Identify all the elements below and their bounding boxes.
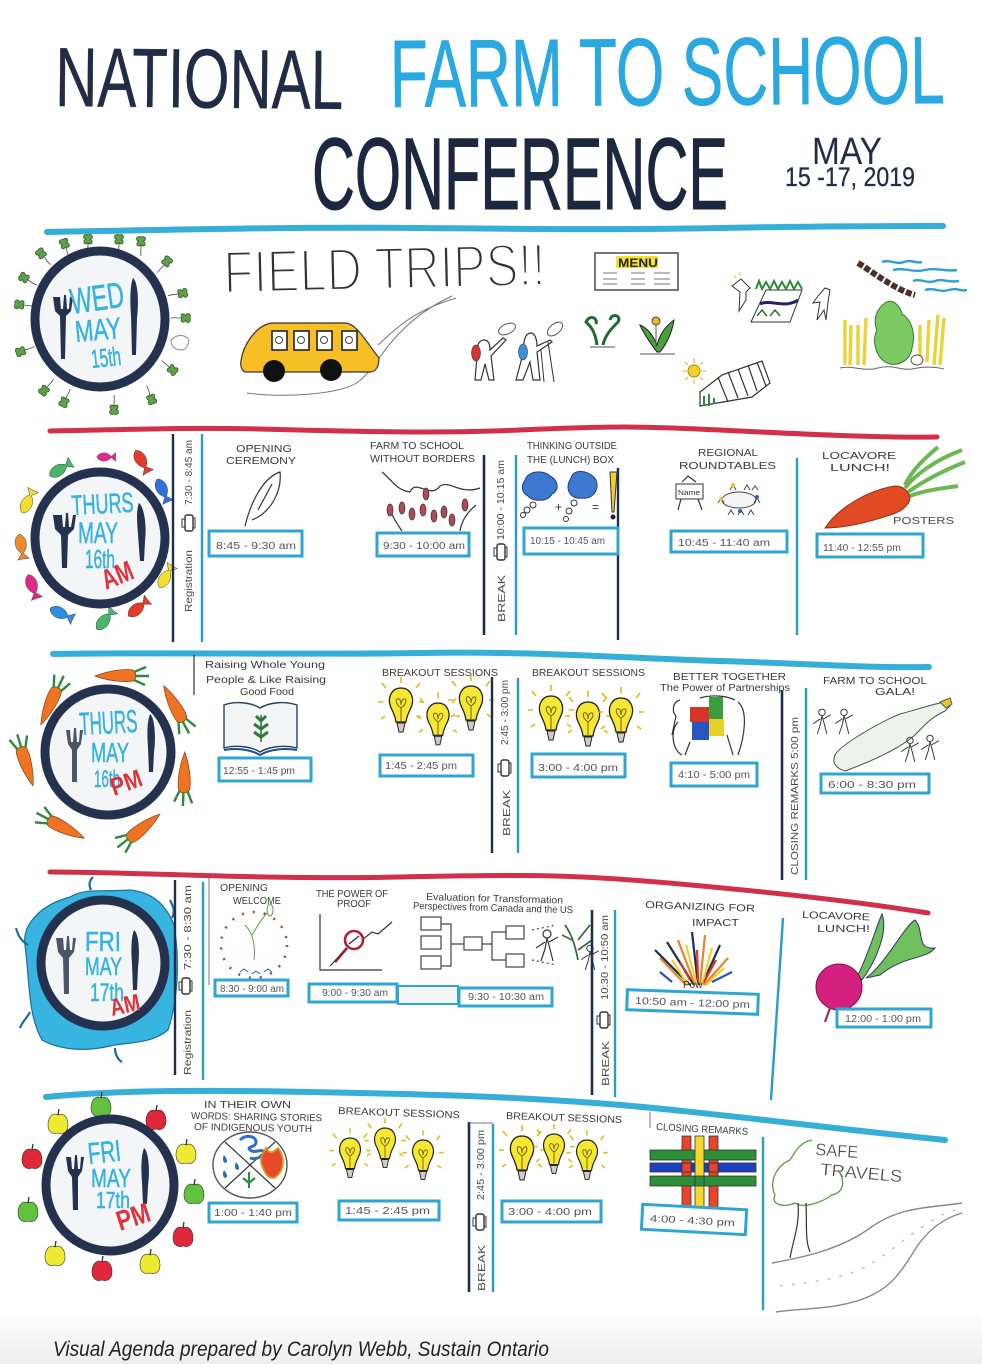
- session: farm to school gala: GALA!: [875, 687, 915, 698]
- icon: chart with magnifier: [320, 914, 392, 970]
- date label: 17th: [96, 1187, 130, 1213]
- session: opening ceremony: 8:45 - 9:30 am: [216, 541, 296, 552]
- closing: safe travels: [772, 1140, 962, 1312]
- plate: [35, 472, 165, 604]
- panel: Fri May 17 PM: [18, 1092, 204, 1281]
- panel: Fri May 17 AM: [16, 877, 177, 1062]
- agenda column: break: 2:45 - 3:00 pm: [500, 680, 511, 745]
- bus body: [241, 323, 379, 372]
- date label: AM: [97, 555, 138, 596]
- session: in their own words: OF INDIGENOUS YOUTH: [194, 1122, 312, 1135]
- date label: [67, 274, 127, 374]
- icon: school bus on road: [241, 296, 456, 395]
- agenda column: break: [592, 910, 615, 1097]
- sprouts ring: [14, 235, 190, 414]
- session: locavore lunch: [817, 447, 965, 557]
- session: opening ceremony: [209, 444, 302, 556]
- session: organizing for impact: [627, 900, 758, 1014]
- icon: bottle with people: [813, 698, 952, 771]
- fish ring: [13, 447, 177, 633]
- session: opening ceremony: CEREMONY: [226, 456, 296, 467]
- date label: 16th: [85, 544, 115, 574]
- date label: THURS: [71, 487, 134, 521]
- agenda column: break: BREAK: [601, 1041, 612, 1086]
- divider: blue rule 5: [46, 1091, 945, 1140]
- session: evaluation for transformation: Perspectives from Canada and the US: [413, 901, 573, 916]
- session: regional roundtables: [671, 448, 787, 552]
- shaded time gap: [398, 986, 458, 1004]
- agenda column: break: BREAK: [477, 1245, 488, 1291]
- icon: garden visitors: [732, 272, 830, 322]
- session: better together: [660, 672, 790, 786]
- session: farm to school gala: [813, 676, 952, 793]
- session: better together: The Power of Partnerships: [660, 683, 790, 694]
- session: organizing for impact: 10:50 am - 12:00 pm: [635, 996, 750, 1011]
- session: locavore lunch: LUNCH!: [817, 924, 870, 935]
- session: breakout sessions 1:45: BREAKOUT SESSIONS: [382, 668, 498, 679]
- session: raising whole young people: People & Like Raising: [206, 675, 326, 686]
- agenda column: closing remarks: CLOSING REMARKS 5:00 pm: [790, 717, 801, 875]
- date label: WED: [67, 274, 127, 322]
- agenda column: break: 10:00 - 10:15 am: [496, 460, 507, 540]
- session: raising whole young people: [194, 655, 326, 781]
- icon: marsh, water and bush: [840, 261, 967, 369]
- date label: AM: [108, 989, 143, 1022]
- agenda column: registration: Registration: [184, 550, 195, 612]
- divider: blue rule 3: [53, 653, 929, 667]
- closing: safe travels: TRAVELS: [820, 1160, 903, 1186]
- agenda column: registration: Registration: [183, 1010, 194, 1075]
- session: farm to school without borders: FARM TO SCHOOL: [370, 441, 464, 452]
- session: breakout sessions 3:00: BREAKOUT SESSIONS: [506, 1111, 623, 1126]
- session: the power of proof: 9:00 - 9:30 am: [322, 988, 388, 999]
- title: [55, 17, 945, 231]
- session: closing remarks: 4:00 - 4:30 pm: [650, 1214, 735, 1229]
- divider: red rule 4: [50, 872, 928, 913]
- icon: people and plants: [536, 925, 599, 970]
- session: farm to school without borders: WITHOUT BORDERS: [370, 454, 475, 465]
- caption: Visual Agenda prepared by Carolyn Webb, Sustain Ontario: [53, 1338, 549, 1361]
- water lines: [882, 261, 967, 291]
- icon: thought clouds: +: [555, 500, 562, 514]
- session: farm to school without borders: 9:30 - 10:00 am: [383, 541, 465, 552]
- session: closing remarks: CLOSING REMARKS: [656, 1122, 749, 1138]
- session: regional roundtables: REGIONAL: [698, 448, 758, 459]
- session: thinking outside the lunch box: 10:15 - 10:45 am: [530, 536, 605, 547]
- agenda column: break: BREAK: [502, 790, 513, 836]
- session: breakout sessions 3:00: BREAKOUT SESSIONS: [532, 668, 645, 679]
- date label: THURS: [78, 703, 138, 742]
- session: the power of proof: THE POWER OF: [316, 889, 388, 900]
- date label: [86, 1135, 154, 1237]
- bottom fade band: [0, 1310, 982, 1364]
- icon: pow explosion: Pow: [683, 980, 703, 991]
- fork: [66, 728, 83, 782]
- icon: light bulbs: [329, 1118, 444, 1180]
- session: opening welcome: OPENING: [220, 883, 268, 894]
- date label: [71, 487, 138, 596]
- knife: [141, 1148, 149, 1204]
- icon: open book with sprig: [224, 703, 297, 755]
- session: breakout sessions 1:45: [329, 1106, 461, 1220]
- panel: Thurs May 16 PM: [9, 667, 197, 855]
- icon: light bulbs: [378, 675, 494, 745]
- session: thinking outside the lunch box: THE (LUNCH) BOX: [527, 455, 614, 466]
- session: opening welcome: WELCOME: [233, 896, 281, 907]
- icon: fiddleheads: [586, 316, 619, 347]
- icon: thought clouds: =: [592, 500, 599, 514]
- agenda divider line: [796, 458, 798, 635]
- fork: [66, 1155, 84, 1210]
- session: in their own words: IN THEIR OWN: [204, 1100, 291, 1111]
- session: breakout sessions 1:45: 1:45 - 2:45 pm: [385, 761, 457, 772]
- session: regional roundtables: 10:45 - 11:40 am: [678, 538, 770, 549]
- agenda column: registration: 7:30 - 8:30 am: [183, 885, 194, 970]
- session: raising whole young people: Raising Whole Young: [205, 660, 325, 671]
- agenda column: break: 2:45 - 3:00 pm: [476, 1130, 487, 1200]
- session: regional roundtables: ROUNDTABLES: [679, 461, 776, 472]
- session: locavore lunch: 11:40 - 12:55 pm: [823, 543, 901, 554]
- session: evaluation for transformation: Evaluation for Transformation: [426, 892, 563, 907]
- agenda column: registration: 7:30 - 8:45 am: [184, 440, 195, 505]
- session: better together: BETTER TOGETHER: [673, 672, 786, 683]
- icon: menu board: [595, 253, 678, 290]
- icon: puzzle and people: [672, 696, 744, 755]
- icon: woven ribbons: [650, 1136, 756, 1208]
- fork: [53, 513, 76, 568]
- session: locavore lunch: 12:00 - 1:00 pm: [845, 1014, 921, 1025]
- knife: [131, 930, 139, 990]
- icon: menu board: MENU: [618, 256, 658, 270]
- icon: greenhouse and sun: [682, 358, 770, 406]
- agenda column: break: BREAK: [497, 575, 508, 622]
- plate: [46, 1119, 174, 1251]
- date label: MAY: [91, 1163, 131, 1193]
- session: locavore lunch: LUNCH!: [830, 463, 890, 474]
- session: breakout sessions 3:00: [499, 1111, 623, 1222]
- fork: [53, 295, 73, 359]
- session: breakout sessions 3:00: 3:00 - 4:00 pm: [538, 763, 618, 774]
- date label: MAY: [74, 312, 122, 349]
- divider: red rule 2: [50, 427, 937, 437]
- session: better together: 4:10 - 5:00 pm: [678, 770, 750, 781]
- date label: PM: [112, 1197, 154, 1237]
- icon: seedling circle: [221, 904, 287, 978]
- fork: [56, 936, 76, 994]
- date label: 15th: [89, 341, 122, 374]
- plate: [41, 900, 165, 1026]
- bus wheels: [263, 360, 285, 382]
- session: raising whole young people: Good Food: [240, 687, 294, 698]
- icon: roundtable: [718, 483, 760, 515]
- session: breakout sessions 3:00: 3:00 - 4:00 pm: [508, 1207, 592, 1218]
- session: opening welcome: 8:30 - 9:00 am: [220, 984, 284, 995]
- icon: light bulbs: [528, 685, 644, 746]
- session: thinking outside the lunch box: [520, 441, 618, 640]
- knife: [147, 714, 155, 772]
- session: breakout sessions 3:00: [528, 668, 645, 777]
- knife: [137, 503, 146, 561]
- session: evaluation for transformation: [398, 892, 599, 1006]
- agenda divider line: [771, 918, 783, 1100]
- session: the power of proof: PROOF: [337, 899, 371, 910]
- session: locavore lunch: [802, 910, 935, 1027]
- title: National: NATIONAL: [55, 30, 344, 127]
- date label: 16th: [94, 766, 120, 793]
- icon: feather: [245, 472, 280, 526]
- session: thinking outside the lunch box: THINKING OUTSIDE: [527, 441, 617, 452]
- icon: dandelion: [640, 317, 675, 354]
- date label: PM: [106, 764, 146, 802]
- icon: beet: [816, 914, 935, 1022]
- icon: tree trunk: [790, 1203, 810, 1258]
- icon: flowchart: [421, 917, 556, 969]
- plate: [35, 251, 165, 387]
- session: breakout sessions 1:45: 1:45 - 2:45 pm: [345, 1206, 430, 1217]
- session: breakout sessions 1:45: BREAKOUT SESSIONS: [338, 1106, 461, 1121]
- session: evaluation for transformation: 9:30 - 10:30 am: [468, 992, 544, 1003]
- dates: [785, 131, 915, 192]
- log: [858, 263, 915, 295]
- road: [247, 296, 456, 395]
- heading: field trips: FIELD TRIPS!!: [223, 231, 546, 306]
- agenda column: registration: [173, 434, 202, 642]
- agenda column: break: 10:30 - 10:50 am: [600, 915, 611, 1000]
- session: in their own words: 1:00 - 1:40 pm: [214, 1208, 292, 1219]
- session: in their own words: [191, 1100, 322, 1222]
- bus windows: [272, 331, 357, 350]
- panel: Thurs May 16 AM: [13, 447, 177, 633]
- plate: [45, 689, 171, 815]
- date label: MAY: [91, 737, 129, 768]
- carrot ring: [9, 667, 197, 855]
- icon: light bulbs: [499, 1124, 608, 1180]
- dates: MAY: [812, 131, 882, 173]
- session: locavore lunch: LOCAVORE: [822, 451, 896, 462]
- session: breakout sessions 1:45: [378, 668, 498, 776]
- agenda column: break: [469, 1122, 493, 1292]
- session: farm to school without borders: [370, 441, 480, 556]
- session: in their own words: WORDS: SHARING STORIES: [191, 1111, 322, 1124]
- session: farm to school gala: 6:00 - 8:30 pm: [828, 780, 916, 791]
- session: farm to school gala: FARM TO SCHOOL: [823, 676, 928, 687]
- agenda column: break: [484, 455, 516, 635]
- session: raising whole young people: 12:55 - 1:45 pm: [223, 766, 295, 777]
- icon: map with markers: [382, 472, 480, 531]
- icon: easel: Name: [678, 490, 700, 497]
- agenda divider line: [762, 1137, 764, 1310]
- date label: [85, 926, 143, 1022]
- session: organizing for impact: ORGANIZING FOR: [645, 900, 755, 915]
- session: closing remarks: [641, 1112, 756, 1235]
- date label: FRI: [86, 1135, 123, 1171]
- icon: hikers: [472, 319, 565, 382]
- date label: MAY: [85, 953, 122, 981]
- session: organizing for impact: IMPACT: [692, 918, 739, 929]
- water splash: [16, 877, 177, 1062]
- reeds: [845, 315, 944, 365]
- session: locavore lunch: POSTERS: [893, 516, 954, 527]
- agenda column: break: [492, 677, 518, 853]
- closing: safe travels: SAFE: [815, 1140, 859, 1162]
- apple ring: [18, 1092, 204, 1281]
- date label: MAY: [78, 517, 118, 550]
- divider: blue rule 1: [47, 226, 943, 232]
- icon: thought clouds: [520, 471, 617, 522]
- agenda column: registration: [175, 878, 209, 1080]
- icon: four elements wheel: [213, 1132, 287, 1198]
- session: locavore lunch: LOCAVORE: [802, 910, 871, 923]
- dates: 15 -17, 2019: [785, 162, 915, 192]
- icon: carrot: [825, 447, 965, 528]
- session: opening welcome: [215, 883, 288, 996]
- date label: [78, 703, 146, 802]
- icon: winding road: [772, 1203, 962, 1312]
- knife: [130, 278, 138, 355]
- session: the power of proof: [309, 889, 397, 1002]
- date label: 17th: [90, 979, 124, 1007]
- date label: FRI: [85, 926, 121, 957]
- session: opening ceremony: OPENING: [236, 444, 292, 455]
- bush: [875, 301, 914, 364]
- panel: Wed May 15: [14, 235, 190, 414]
- icon: tree: [773, 1140, 843, 1205]
